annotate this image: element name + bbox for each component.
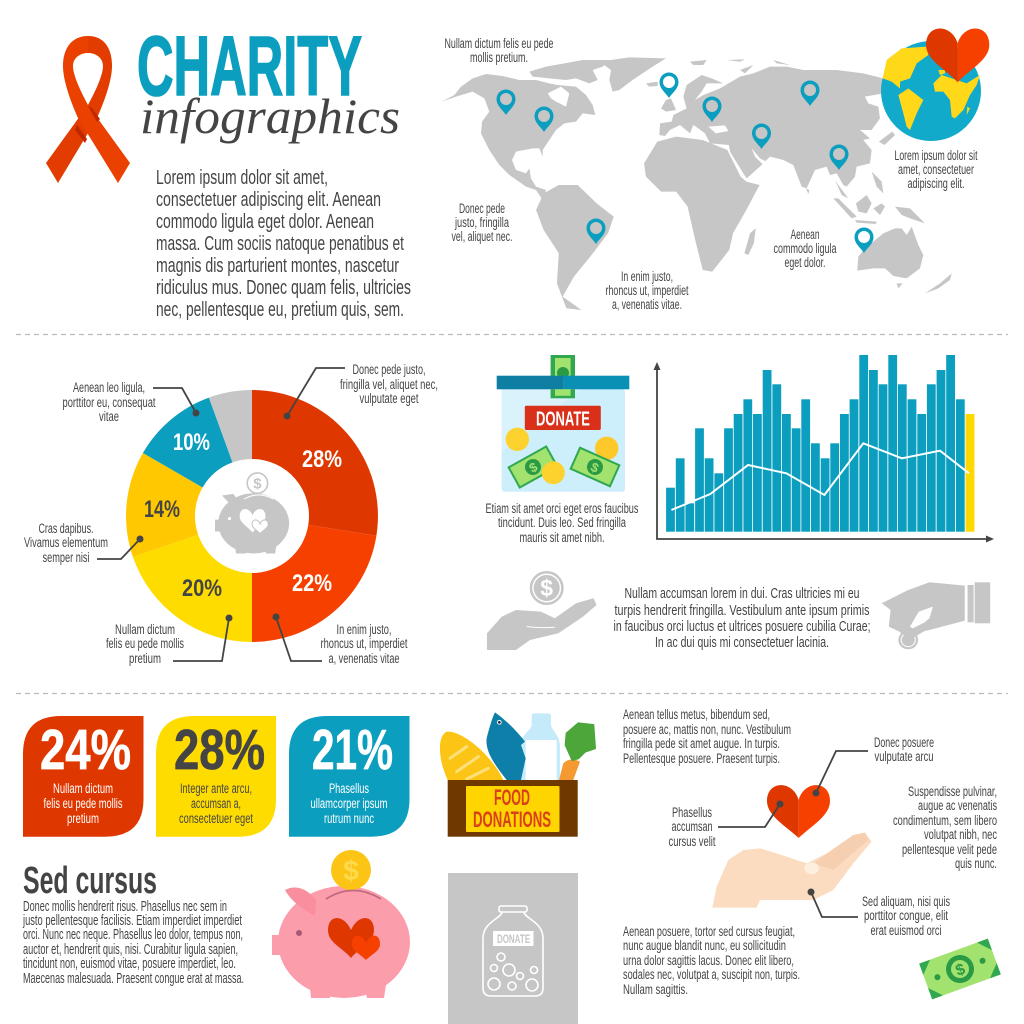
- icon: piggy bank grey: [215, 473, 289, 553]
- donut percentages: 28%: [302, 446, 342, 473]
- icon: hand dropping coin: [882, 582, 990, 649]
- icon: open hand with coin: $: [540, 575, 553, 601]
- donate sign: DONATE: [536, 408, 590, 430]
- top right text block: Aenean tellus metus, bibendum sed,: [623, 707, 770, 722]
- map labels: Aenean: [790, 227, 820, 242]
- stat card: 21%: rutrum nunc: [324, 811, 374, 826]
- map labels: justo, fringilla: [454, 215, 509, 230]
- trend line: [671, 443, 969, 510]
- donut percentages: [144, 429, 342, 602]
- chart axes: [654, 362, 994, 542]
- donut labels: a, venenatis vitae: [328, 651, 400, 666]
- map pins: [496, 72, 874, 253]
- sed cursus text block: orci. Nunc nec neque. Phasellus leo dolor, tempus non,: [23, 927, 243, 943]
- heart callout labels: erat euismod orci: [870, 923, 942, 938]
- center text block: turpis hendrerit fringilla. Vestibulum ante ipsum primis: [614, 603, 870, 619]
- donation box caption: mauris sit amet nibh.: [520, 530, 604, 545]
- world map: [442, 57, 952, 310]
- sed cursus text block: tincidunt non, euismod vitae, posuere imperdiet, leo.: [23, 956, 236, 972]
- donut percentages: 22%: [292, 570, 332, 597]
- jar label: DONATE: [497, 932, 530, 946]
- intro text block: Lorem ipsum dolor sit amet,: [156, 167, 328, 189]
- title: [137, 19, 400, 144]
- map labels: adipiscing elit.: [908, 176, 964, 191]
- stat card: 21%: 21%: [312, 718, 393, 782]
- heading: sed cursus: Sed cursus: [23, 860, 157, 902]
- stat card: 28%: [156, 716, 276, 837]
- bottom text block: Nullam sagittis.: [623, 982, 688, 997]
- heart callout labels: vulputate arcu: [874, 749, 934, 764]
- bottom text block: urna dolor sagittis lacus. Donec elit libero,: [623, 953, 794, 968]
- bottom text block: [623, 924, 800, 997]
- donut labels: fringilla vel, aliquet nec,: [340, 377, 438, 392]
- heart callout labels: Donec posuere: [874, 735, 934, 750]
- donut chart: [126, 390, 378, 642]
- donut percentages: 10%: [173, 429, 210, 456]
- donation box caption: Etiam sit amet orci eget eros faucibus: [486, 501, 639, 516]
- intro text block: nec, pellentesque eu, pretium quis, sem.: [156, 299, 404, 321]
- sed cursus text block: justo pellentesque facilisis. Etiam imperdiet imperdiet: [22, 913, 242, 929]
- icon: hand holding heart: [712, 785, 872, 908]
- map labels: In enim justo,: [621, 269, 673, 284]
- sed cursus text block: Maecenas malesuada. Praesent congue erat at massa.: [23, 971, 244, 987]
- icon: open hand with coin: [487, 571, 597, 650]
- heart callout leaders: [718, 751, 868, 917]
- sed cursus text block: Donec mollis hendrerit risus. Phasellus nec sem in: [23, 899, 227, 915]
- coin: $: [343, 855, 359, 886]
- right aligned text block: quis nunc.: [955, 856, 997, 871]
- heart callout labels: Sed aliquam, nisi quis: [862, 894, 950, 909]
- donut labels: felis eu pede mollis: [106, 636, 184, 651]
- stat card: 28%: Integer ante arcu,: [180, 781, 252, 796]
- bottom text block: sodales nec, volutpat a, suscipit non, turpis.: [623, 967, 800, 982]
- stat card: 21%: [289, 716, 410, 837]
- icon: piggy bank grey: $: [253, 475, 262, 492]
- intro text block: massa. Cum sociis natoque penatibus et: [156, 233, 404, 255]
- sed cursus text block: auctor et, hendrerit quis, nisi. Curabitur ligula sapien,: [23, 942, 238, 958]
- stat card: 21%: Phasellus: [329, 781, 369, 796]
- donut labels: semper nisi: [42, 550, 90, 565]
- map labels: Donec pede: [459, 201, 505, 216]
- donut labels: porttitor eu, consequat: [62, 395, 156, 410]
- icon: donation box: $: [588, 459, 602, 476]
- stat card: 24%: Nullam dictum: [53, 781, 113, 796]
- top right text block: Pellentesque posuere. Praesent turpis.: [623, 751, 780, 766]
- map labels: amet, consectetuer: [898, 162, 974, 177]
- right aligned text block: [893, 784, 997, 871]
- coin: [331, 850, 371, 890]
- icon: food donations box: FOOD: [494, 785, 530, 810]
- heart callout labels: porttitor congue, elit: [864, 908, 948, 923]
- donation box caption: [486, 501, 639, 545]
- map labels: eget dolor.: [784, 255, 826, 270]
- icon: pink piggy bank: [272, 850, 410, 998]
- heart callout labels: Phasellus: [672, 805, 712, 820]
- map labels: Nullam dictum felis eu pede: [444, 36, 554, 51]
- icon: food donations box: DONATIONS: [473, 807, 551, 832]
- stat card: 28%: 28%: [174, 718, 265, 782]
- donut labels: In enim justo,: [336, 622, 392, 637]
- map labels: Lorem ipsum dolor sit: [894, 148, 978, 163]
- donut labels: rhoncus ut, imperdiet: [320, 636, 408, 651]
- heart callout labels: [668, 735, 950, 938]
- sed cursus text block: [22, 899, 244, 987]
- bottom text block: nunc augue blandit nunc, eu sollicitudin: [623, 938, 786, 953]
- heart callout labels: cursus velit: [668, 834, 716, 849]
- icon: food donations box: [440, 712, 595, 837]
- intro text block: magnis dis parturient montes, nascetur: [156, 255, 399, 277]
- stat card: 21%: ullamcorper ipsum: [310, 796, 388, 811]
- stat card: 24%: felis eu pede mollis: [44, 796, 123, 811]
- map labels: mollis pretium.: [470, 50, 528, 65]
- heart callout labels: accumsan: [672, 819, 712, 834]
- donut labels: Nullam dictum: [115, 622, 175, 637]
- intro text block: commodo ligula eget dolor. Aenean: [156, 211, 374, 233]
- donut percentages: 14%: [144, 496, 180, 523]
- jar: [483, 906, 543, 996]
- icon: red ribbon: [46, 36, 130, 183]
- center text block: in faucibus orci luctus et ultrices posuere cubilia Curae;: [614, 619, 870, 635]
- top right text block: fringilla pede sit amet augue. In turpis.: [623, 736, 780, 751]
- map labels: [444, 36, 978, 312]
- map labels: rhoncus ut, imperdiet: [606, 283, 689, 298]
- icon: donation box: [497, 355, 629, 492]
- icon: dollar bill: [919, 939, 1001, 999]
- hearts: [328, 918, 380, 960]
- icon: donation box: $: [526, 459, 541, 476]
- center text block: [614, 586, 870, 651]
- title: infographics: [140, 88, 400, 144]
- donut labels: vitae: [99, 409, 119, 424]
- donut labels: vulputate eget: [360, 391, 419, 406]
- donut labels: Cras dapibus.: [38, 521, 94, 536]
- map labels: commodo ligula: [774, 241, 837, 256]
- bar chart: [654, 355, 994, 542]
- donut labels: [24, 362, 438, 666]
- donut labels: pretium: [129, 651, 161, 666]
- panel: grey donate jar: [448, 873, 578, 1024]
- top right text block: [623, 707, 791, 766]
- stat card: 28%: accumsan a,: [191, 796, 241, 811]
- center text block: Nullam accumsan lorem in dui. Cras ultricies mi eu: [624, 586, 860, 602]
- intro text block: [156, 167, 411, 321]
- donut leader lines: [97, 368, 345, 661]
- center text block: In ac dui quis mi consectetuer lacinia.: [655, 635, 829, 651]
- intro text block: ridiculus mus. Donec quam felis, ultricies: [156, 277, 411, 299]
- donation box caption: tincidunt. Duis leo. Sed fringilla: [498, 515, 626, 530]
- donut labels: Vivamus elementum: [24, 535, 108, 550]
- jar label: [493, 931, 534, 946]
- stat card: 24%: pretium: [67, 811, 99, 826]
- donut labels: Donec pede justo,: [352, 362, 426, 377]
- map labels: a, venenatis vitae.: [612, 297, 682, 312]
- stat card: 28%: consectetuer eget: [179, 811, 253, 826]
- stat card: 24%: [23, 716, 144, 837]
- icon: dollar bill: $: [953, 961, 968, 980]
- stat card: 24%: 24%: [40, 718, 131, 782]
- donut percentages: 20%: [182, 575, 222, 602]
- intro text block: consectetuer adipiscing elit. Aenean: [156, 189, 381, 211]
- donut labels: Aenean leo ligula,: [73, 380, 145, 395]
- bottom text block: Aenean posuere, tortor sed cursus feugiat,: [623, 924, 795, 939]
- icon: globe with heart: [881, 29, 989, 141]
- map labels: vel, aliquet nec.: [452, 229, 512, 244]
- title: CHARITY: [137, 19, 362, 113]
- top right text block: posuere ac, mattis non, nunc. Vestibulum: [623, 722, 791, 737]
